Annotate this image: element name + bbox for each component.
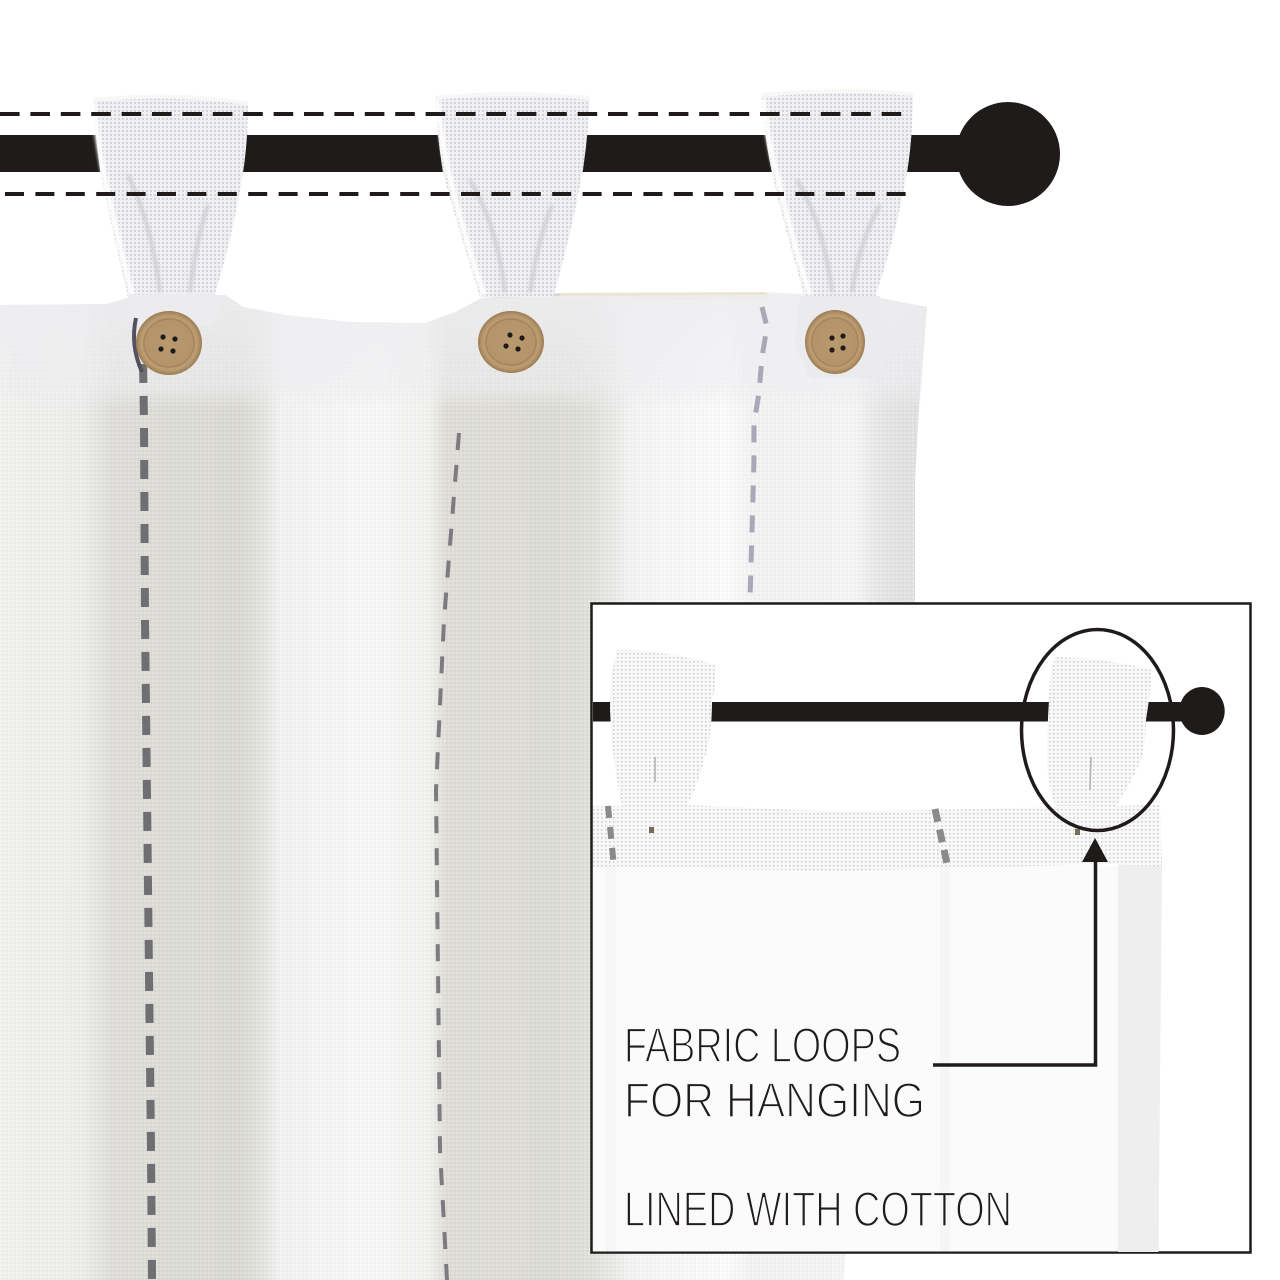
curtain header hem <box>0 295 927 410</box>
callout arrow <box>933 838 1108 1065</box>
fabric tab one <box>93 97 248 325</box>
inset curtain lining <box>593 866 1119 1252</box>
inset right side hem <box>1118 862 1162 1252</box>
stitched line one <box>142 300 152 1280</box>
callout label: lined with cotton: LINED WITH COTTON <box>624 1183 1012 1237</box>
inset detail panel <box>592 604 1250 1252</box>
stitched line two <box>436 433 459 1280</box>
fabric tab two <box>435 94 590 297</box>
lower dashed guide line <box>5 192 906 196</box>
curtain panel <box>0 292 927 1280</box>
curtain rod with finial <box>0 102 1060 206</box>
callout label: fabric loops for hanging <box>624 1019 925 1128</box>
wooden button three <box>805 310 865 374</box>
wooden button two <box>478 311 544 373</box>
callout label: fabric loops for hanging: FABRIC LOOPS <box>624 1019 901 1073</box>
upper dashed guide line <box>0 112 902 116</box>
highlight ellipse around loop <box>1022 630 1174 830</box>
fabric tab three <box>761 91 913 378</box>
inset curtain rod <box>593 687 1225 735</box>
inset fabric loop right <box>1047 657 1152 806</box>
inset fabric loop left <box>610 650 716 806</box>
stitched line three <box>750 307 767 600</box>
wooden button one <box>134 311 202 375</box>
callout label: fabric loops for hanging: FOR HANGING <box>624 1074 925 1128</box>
inset top hem band <box>593 805 1162 871</box>
